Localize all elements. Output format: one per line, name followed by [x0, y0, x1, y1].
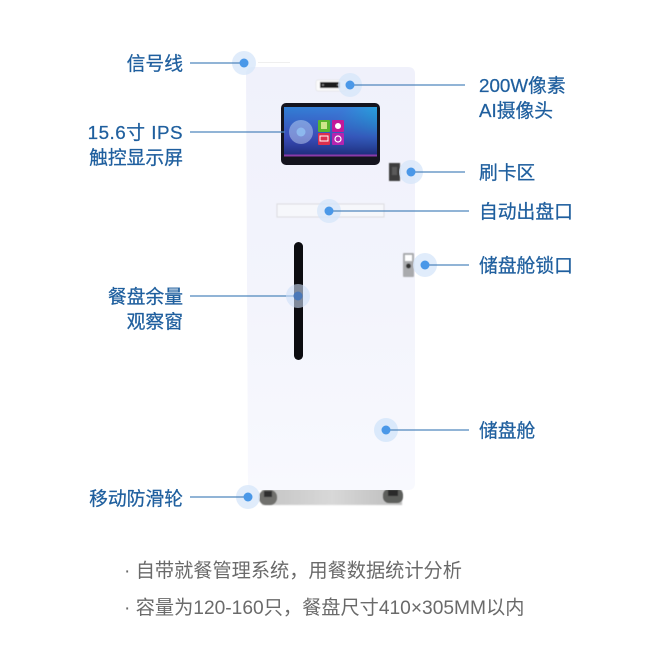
- marker: camera: [338, 73, 465, 97]
- label: card area: 刷卡区: [479, 162, 535, 183]
- label: signal cable: 信号线: [127, 53, 183, 74]
- label: observation window: 餐盘余量: [108, 286, 183, 307]
- label: touch screen: 15.6寸 IPS: [88, 122, 183, 143]
- marker: storage: [374, 418, 469, 442]
- wheels: [259, 489, 403, 505]
- card reader: [389, 163, 400, 181]
- storage lock: [403, 253, 414, 277]
- marker: card reader: [399, 160, 465, 184]
- touch screen: [281, 103, 380, 165]
- observation window: [294, 242, 303, 360]
- tray outlet: [277, 204, 384, 217]
- label: storage: 储盘舱: [479, 420, 535, 441]
- marker: lock: [413, 253, 469, 277]
- cabinet body: [246, 67, 415, 490]
- label: camera: [478, 75, 566, 121]
- note 2: · 容量为120-160只，餐盘尺寸410×305MM以内: [124, 598, 524, 619]
- label: camera: AI摄像头: [479, 100, 553, 121]
- label: wheels: 移动防滑轮: [89, 488, 183, 509]
- label: lock: 储盘舱锁口: [479, 255, 573, 276]
- cabinet base shadow: [262, 488, 402, 505]
- note 1: · 自带就餐管理系统，用餐数据统计分析: [124, 561, 462, 582]
- marker: touch screen: [190, 120, 313, 144]
- AI camera: [316, 80, 346, 91]
- marker: observation window: [190, 284, 310, 308]
- marker: tray outlet: [317, 199, 469, 223]
- label: observation window: 观察窗: [127, 311, 183, 332]
- label: tray outlet: 自动出盘口: [479, 201, 573, 222]
- label: touch screen: [88, 122, 183, 168]
- label: touch screen: 触控显示屏: [89, 147, 183, 168]
- marker: signal cable: [190, 51, 256, 75]
- signal cable: [258, 62, 290, 63]
- label: camera: 200W像素: [479, 75, 566, 96]
- label: observation window: [108, 286, 183, 332]
- marker: wheels: [190, 485, 260, 509]
